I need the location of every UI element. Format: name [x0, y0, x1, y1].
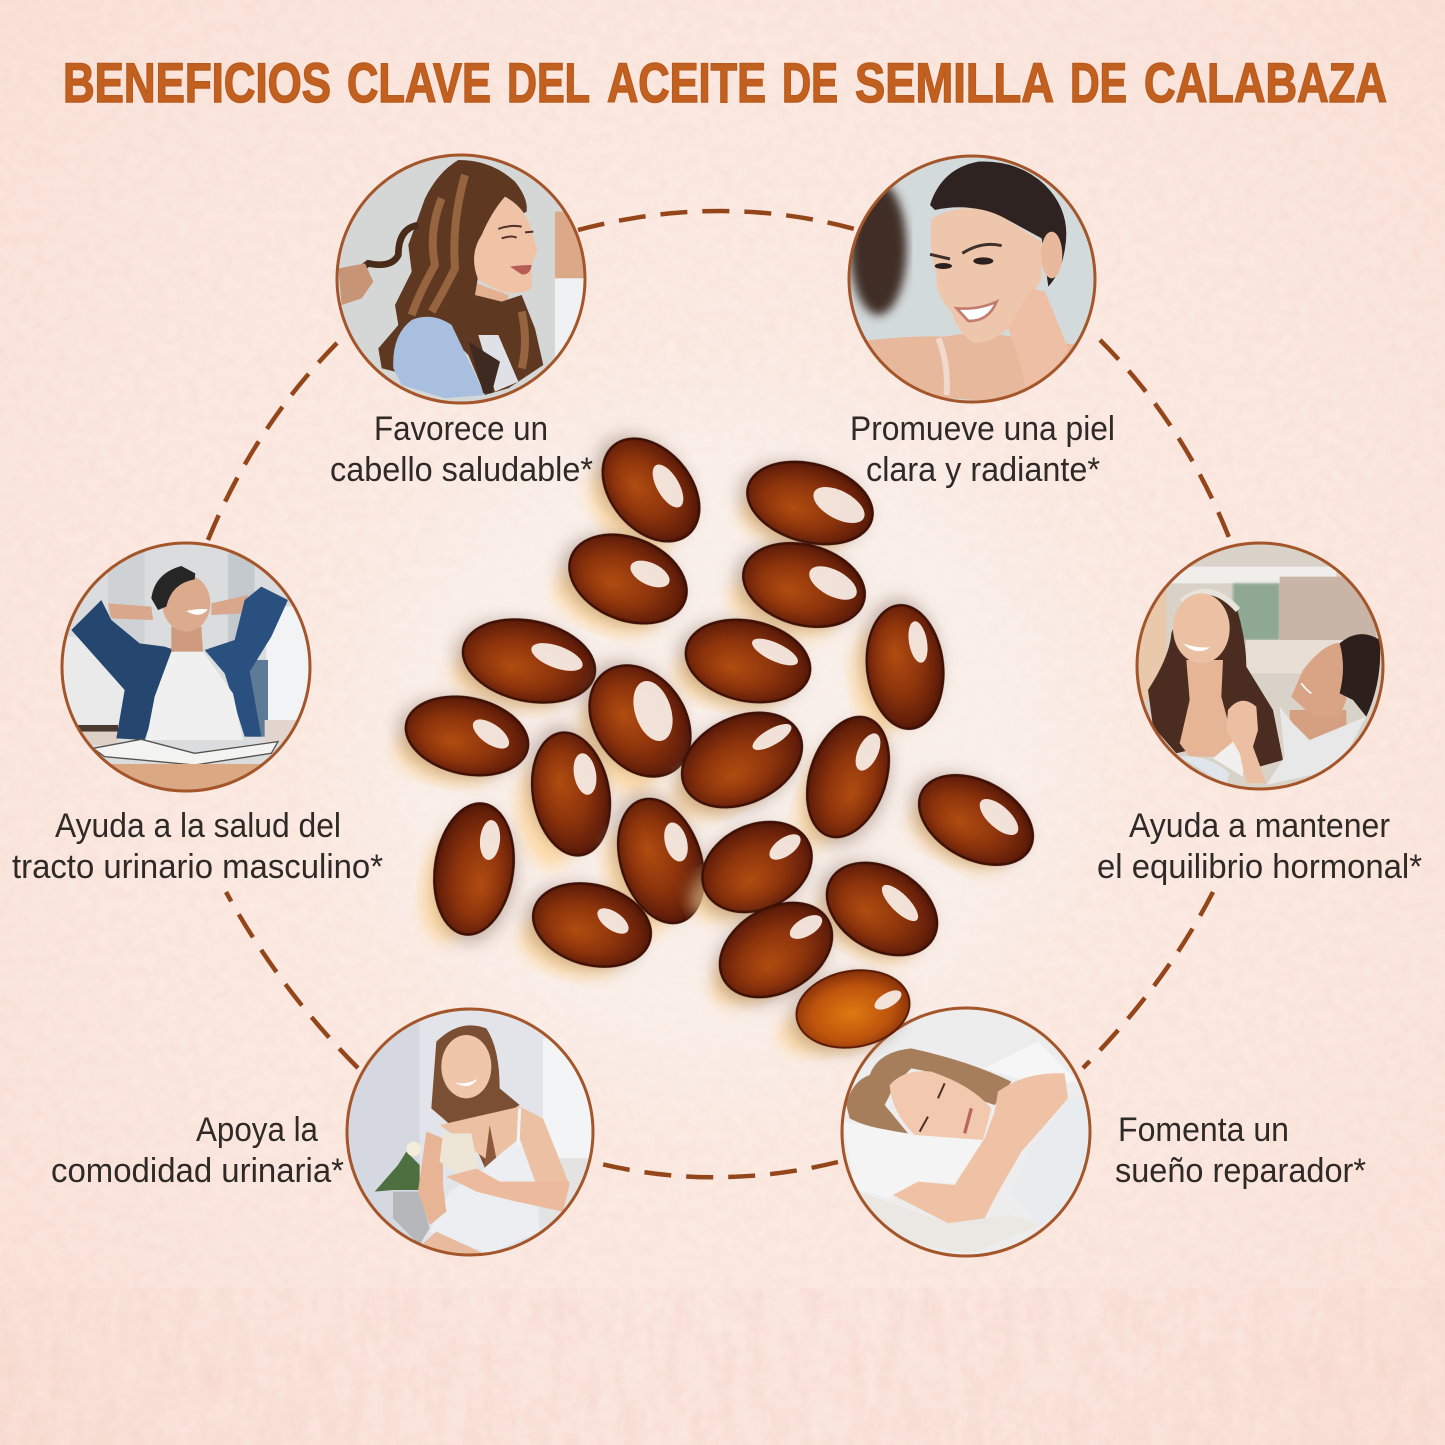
- capsules cluster: [390, 420, 1048, 1061]
- label: radiant skin: clara y radiante*: [866, 451, 1100, 489]
- label: healthy hair: [330, 410, 593, 489]
- title: DEL: [507, 51, 590, 114]
- dashed ring connecting the benefits: [208, 211, 1230, 1177]
- label: restful sleep: Fomenta un: [1118, 1111, 1289, 1149]
- label: urinary comfort: comodidad urinaria*: [51, 1152, 344, 1190]
- photo: relaxed man with book: [58, 540, 313, 797]
- photo: woman with a cup: [343, 1005, 598, 1260]
- photo: woman sleeping: [838, 1005, 1096, 1260]
- title: CLAVE: [347, 51, 491, 114]
- title: BENEFICIOS: [63, 51, 331, 114]
- label: healthy hair: cabello saludable*: [330, 451, 593, 489]
- label: hormonal balance: Ayuda a mantener: [1129, 807, 1390, 845]
- title: [63, 51, 1387, 114]
- title: ACEITE: [607, 51, 766, 114]
- title: SEMILLA: [855, 51, 1054, 114]
- photo: woman touching her face: [845, 155, 1100, 405]
- label: radiant skin: [850, 410, 1115, 489]
- photo: woman with wavy hair: [335, 155, 590, 405]
- label: urinary comfort: Apoya la: [196, 1111, 318, 1149]
- label: healthy hair: Favorece un: [374, 410, 548, 448]
- label: urinary comfort: [51, 1111, 344, 1190]
- title: DE: [1070, 51, 1127, 114]
- title: DE: [782, 51, 838, 114]
- label: hormonal balance: el equilibrio hormonal*: [1097, 848, 1422, 886]
- photo: smiling couple: [1133, 540, 1388, 792]
- label: restful sleep: [1115, 1111, 1366, 1190]
- label: male urinary tract: Ayuda a la salud del: [55, 807, 341, 845]
- label: male urinary tract: tracto urinario masculino*: [12, 848, 383, 886]
- label: restful sleep: sueño reparador*: [1115, 1152, 1366, 1190]
- label: hormonal balance: [1097, 807, 1422, 886]
- label: radiant skin: Promueve una piel: [850, 410, 1115, 448]
- label: male urinary tract: [12, 807, 383, 886]
